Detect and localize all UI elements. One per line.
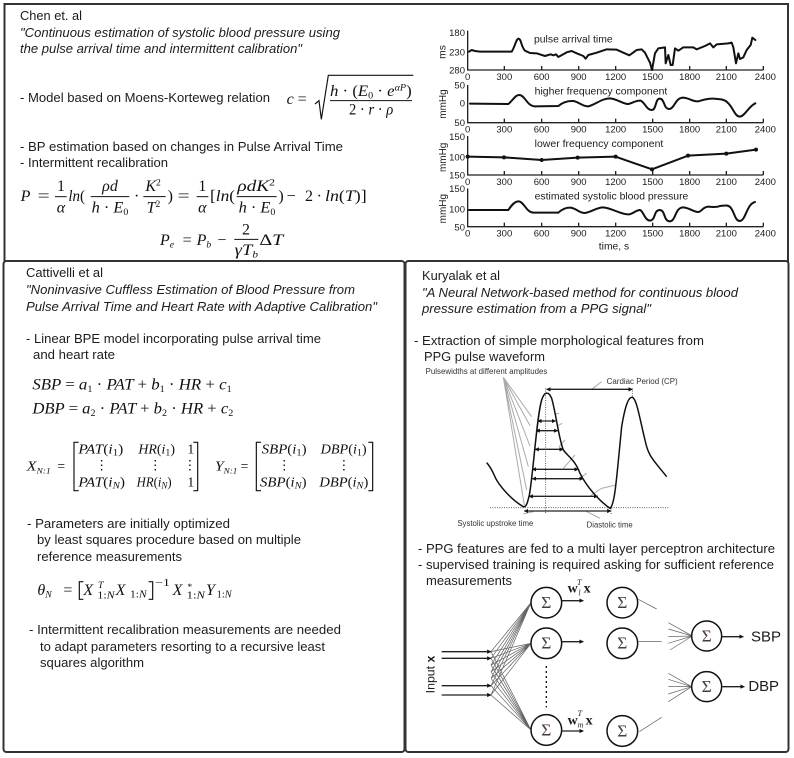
chart: lower frequency component: 150 bbox=[449, 132, 465, 143]
chart: lower frequency component: 1200 bbox=[605, 177, 626, 188]
text: parameter optimization bullet: reference measurements bbox=[37, 549, 182, 564]
chart: pulse arrival time: 600 bbox=[534, 72, 550, 83]
chart: estimated systolic blood pressure: time, s bbox=[599, 241, 629, 252]
author heading: Kuryalak: Kuryalak et al bbox=[422, 268, 500, 283]
paper title: Cattivelli: "Noninvasive Cuffless Estimation of Blood Pressure from bbox=[26, 282, 355, 297]
paper title: Kuryalak: "A Neural Network-based method for continuous blood bbox=[422, 285, 739, 300]
equation: pressure from PAT: α bbox=[198, 199, 207, 216]
chart: lower frequency component: 300 bbox=[496, 177, 512, 188]
chart: lower frequency component: 1800 bbox=[679, 177, 700, 188]
matrix: X: ⋮ bbox=[95, 457, 108, 472]
chart: estimated systolic blood pressure: 2400 bbox=[755, 229, 776, 240]
equation: pressure from PAT: [ln( bbox=[210, 188, 235, 205]
equations: SBP and DBP bbox=[31, 376, 234, 419]
chart: estimated systolic blood pressure: 1200 bbox=[605, 229, 626, 240]
text: parameter optimization bullet: - Parameters are initially optimized bbox=[27, 516, 230, 531]
text: parameter optimization bullet bbox=[27, 516, 301, 564]
output nodes bbox=[692, 621, 722, 702]
chart: lower frequency component: 150 bbox=[449, 171, 465, 182]
input label: Input x bbox=[423, 655, 437, 693]
equation: wave velocity: · bbox=[373, 83, 387, 100]
chart: estimated systolic blood pressure: mmHg bbox=[438, 194, 449, 223]
second layer nodes: Σ bbox=[617, 634, 627, 653]
equation: pressure from PAT: ln(T)] bbox=[325, 188, 367, 205]
equation: wave velocity: αP bbox=[395, 83, 406, 94]
chart: higher frequency component: 50 bbox=[454, 81, 465, 92]
chart: pulse arrival time: 2100 bbox=[716, 72, 737, 83]
equation: pressure from PAT: ) bbox=[278, 188, 284, 205]
chart: higher frequency component bbox=[438, 81, 776, 136]
equation: estimated pressure: 2 bbox=[242, 221, 250, 238]
chart: estimated systolic blood pressure: 600 bbox=[534, 229, 550, 240]
equation: estimated pressure: γT bbox=[235, 242, 250, 259]
input arrows bbox=[442, 652, 491, 695]
equation: pressure from PAT: = bbox=[38, 188, 50, 205]
chart: higher frequency component: 2400 bbox=[755, 125, 776, 136]
weight label: w l: w bbox=[568, 582, 579, 597]
equation: theta least squares: 1:N bbox=[187, 590, 206, 601]
second layer nodes bbox=[607, 587, 638, 746]
equation: pressure from PAT: h · E bbox=[239, 199, 270, 216]
equation: pressure from PAT: 2 bbox=[305, 188, 313, 205]
equation: pressure from PAT: ) bbox=[168, 188, 173, 205]
text: MLP bullets: - supervised training is required asking for sufficient reference bbox=[418, 557, 774, 572]
equation: estimated pressure: b bbox=[252, 250, 258, 261]
chart: pulse arrival time: 180 bbox=[449, 28, 465, 39]
matrix: Y: ) bbox=[362, 441, 367, 457]
matrix: X: ⋮ bbox=[149, 457, 162, 472]
equation: pressure from PAT: − bbox=[287, 188, 296, 205]
chart: estimated systolic blood pressure: estimated systolic blood pressure bbox=[535, 191, 689, 202]
weight label: w l: T bbox=[577, 578, 582, 587]
matrix: X: X bbox=[27, 459, 35, 474]
paper title: Cattivelli bbox=[26, 282, 378, 314]
chart: pulse arrival time: 1500 bbox=[642, 72, 663, 83]
text: BP estimation bullets: - Intermittent recalibration bbox=[20, 155, 168, 170]
matrix: X: N:1 bbox=[35, 466, 51, 475]
text: MLP bullets: - PPG features are fed to a multi layer perceptron architecture bbox=[418, 541, 775, 556]
matrix: X: = bbox=[57, 459, 65, 474]
hidden layer nodes: Σ bbox=[541, 720, 551, 739]
chart: higher frequency component: 0 bbox=[460, 99, 465, 110]
matrix: Y bbox=[215, 441, 373, 492]
text: linear BPE model bullet bbox=[26, 331, 321, 362]
matrix: X: HR(i bbox=[138, 441, 165, 456]
matrix: Y: N bbox=[294, 481, 302, 492]
chart: higher frequency component: 900 bbox=[571, 125, 587, 136]
matrix: X: PAT(i bbox=[78, 441, 112, 456]
equations: SBP and DBP: HR + c bbox=[181, 400, 228, 417]
matrix: X: 1 bbox=[187, 475, 194, 490]
matrix: Y: ) bbox=[302, 441, 307, 457]
second layer nodes: Σ bbox=[617, 593, 627, 612]
label: cardiac period: Cardiac Period (CP) bbox=[607, 377, 678, 386]
equation: pressure from PAT: · bbox=[134, 188, 139, 205]
matrix: X bbox=[25, 441, 198, 492]
weight label: w m: w bbox=[568, 713, 579, 728]
chart: lower frequency component: 900 bbox=[571, 177, 587, 188]
chart: higher frequency component: higher frequency component bbox=[535, 87, 667, 98]
equations: SBP and DBP: · bbox=[92, 376, 106, 393]
equation: estimated pressure: P bbox=[160, 232, 170, 249]
hidden layer dotted ellipsis bbox=[544, 666, 548, 707]
equation: pressure from PAT: 2 bbox=[269, 178, 275, 189]
matrix: Y: DBP(i bbox=[319, 475, 356, 490]
pulsewidth arrows bbox=[524, 389, 632, 511]
equation: theta least squares: X bbox=[172, 582, 184, 599]
equations: SBP and DBP: HR + c bbox=[179, 376, 226, 393]
chart: lower frequency component: 0 bbox=[465, 177, 470, 188]
input connections bbox=[491, 603, 531, 730]
equation: pressure from PAT bbox=[20, 178, 367, 218]
output arrows bbox=[722, 637, 744, 687]
chart: estimated systolic blood pressure: 1500 bbox=[642, 229, 663, 240]
matrix: Y: ) bbox=[363, 475, 368, 491]
chart: lower frequency component: mmHg bbox=[438, 143, 449, 172]
equation: theta least squares: T bbox=[98, 580, 104, 591]
equation: estimated pressure: − bbox=[217, 232, 226, 249]
equations: SBP and DBP: 1 bbox=[160, 384, 165, 395]
matrix: Y: SBP(i bbox=[262, 441, 296, 456]
text: parameter optimization bullet: by least squares procedure based on multiple bbox=[37, 532, 301, 547]
matrix: Y: = bbox=[241, 459, 249, 474]
text: recalibration bullet: squares algorithm bbox=[40, 655, 144, 670]
equation: theta least squares: 1:N bbox=[130, 590, 148, 601]
author heading: Cattivelli: Cattivelli et al bbox=[26, 265, 103, 280]
equation: pressure from PAT: 1 bbox=[57, 178, 65, 195]
matrix: X: N bbox=[160, 481, 168, 492]
hidden layer nodes bbox=[531, 587, 562, 745]
equations: SBP and DBP: 2 bbox=[162, 408, 167, 419]
chart: pulse arrival time: 280 bbox=[449, 65, 465, 76]
equation: pressure from PAT: P bbox=[20, 188, 31, 205]
equation: estimated pressure: = bbox=[183, 232, 192, 249]
text: linear BPE model bullet: - Linear BPE model incorporating pulse arrival time bbox=[26, 331, 321, 346]
text: recalibration bullet bbox=[29, 622, 341, 670]
matrix: X: ) bbox=[167, 475, 172, 491]
matrix: X: 1 bbox=[187, 441, 194, 456]
text: BP estimation bullets: - BP estimation based on changes in Pulse Arrival Time bbox=[20, 139, 343, 154]
diagram: PPG pulse waveform features bbox=[426, 367, 678, 529]
chart: lower frequency component: lower frequency component bbox=[535, 139, 663, 150]
chart: higher frequency component: 1800 bbox=[679, 125, 700, 136]
chart: estimated systolic blood pressure: 1800 bbox=[679, 229, 700, 240]
equation: pressure from PAT: 0 bbox=[270, 207, 276, 218]
equation: pressure from PAT: ln( bbox=[68, 188, 85, 205]
chart: lower frequency component: 2400 bbox=[755, 177, 776, 188]
chart: estimated systolic blood pressure: 0 bbox=[465, 229, 470, 240]
output nodes: Σ bbox=[702, 626, 712, 645]
equation: wave velocity: h · (E bbox=[330, 83, 368, 100]
panel: Kuryalak et al bbox=[406, 261, 788, 752]
matrix: X: ) bbox=[170, 441, 175, 457]
matrix: X: ) bbox=[118, 441, 123, 457]
chart: estimated systolic blood pressure: 50 bbox=[454, 223, 465, 234]
equation: wave velocity bbox=[287, 75, 413, 119]
equation: pressure from PAT: h · E bbox=[92, 199, 123, 216]
text: morphological features bullet bbox=[414, 333, 704, 364]
equation: pressure from PAT: 1 bbox=[198, 178, 206, 195]
text: morphological features bullet: PPG pulse waveform bbox=[424, 349, 545, 364]
chart: estimated systolic blood pressure: 150 bbox=[449, 184, 465, 195]
equation: wave velocity: 0 bbox=[368, 91, 373, 102]
diagram: multilayer perceptron bbox=[423, 578, 781, 746]
second layer nodes: Σ bbox=[617, 721, 627, 740]
equations: SBP and DBP: PAT + b bbox=[106, 376, 159, 393]
equations: SBP and DBP: 1 bbox=[87, 384, 93, 395]
chart: higher frequency component: 1500 bbox=[642, 125, 663, 136]
chart: estimated systolic blood pressure: 2100 bbox=[716, 229, 737, 240]
matrix: Y: 1 bbox=[296, 447, 302, 458]
chart: lower frequency component: 2100 bbox=[716, 177, 737, 188]
matrix: X: PAT(i bbox=[78, 475, 112, 490]
label: diastolic time: Diastolic time bbox=[587, 520, 633, 529]
equation: wave velocity: = bbox=[298, 91, 307, 108]
chart: estimated systolic blood pressure: 300 bbox=[496, 229, 512, 240]
equation: theta least squares: −1 bbox=[155, 578, 170, 589]
chart: pulse arrival time: 300 bbox=[496, 72, 512, 83]
text: recalibration bullet: to adapt parameters resorting to a recursive least bbox=[40, 639, 325, 654]
equation: wave velocity: c bbox=[287, 91, 294, 108]
text: recalibration bullet: - Intermittent recalibration measurements are needed bbox=[29, 622, 341, 637]
matrix: X: HR(i bbox=[137, 475, 162, 490]
equation: theta least squares: Y bbox=[206, 582, 217, 599]
chart: higher frequency component: 600 bbox=[534, 125, 550, 136]
equation: wave velocity: e bbox=[387, 83, 394, 100]
pulsewidth leader lines bbox=[503, 377, 616, 518]
equations: SBP and DBP: · bbox=[165, 376, 179, 393]
matrix: Y: N:1 bbox=[223, 466, 237, 475]
equation: estimated pressure bbox=[159, 221, 285, 261]
equation: pressure from PAT: = bbox=[178, 188, 190, 205]
chart: pulse arrival time: 0 bbox=[465, 72, 470, 83]
waveform curve bbox=[487, 393, 667, 508]
second layer outgoing lines bbox=[638, 599, 662, 732]
label: systolic upstroke time: Systolic upstroke time bbox=[457, 519, 534, 528]
equations: SBP and DBP: 2 bbox=[90, 408, 96, 419]
equation: pressure from PAT: ρd bbox=[101, 178, 119, 195]
dotted reference lines bbox=[490, 388, 668, 515]
text: BP estimation bullets bbox=[20, 139, 343, 170]
text: morphological features bullet: - Extraction of simple morphological features from bbox=[414, 333, 704, 348]
equation: pressure from PAT: ρdK bbox=[237, 178, 264, 195]
equations: SBP and DBP: 2 bbox=[228, 408, 234, 419]
equation: theta least squares: X bbox=[115, 582, 127, 599]
matrix: Y: ⋮ bbox=[337, 457, 351, 472]
chart: pulse arrival time: 2400 bbox=[755, 72, 776, 83]
weight label: w m: m bbox=[578, 720, 584, 729]
weight label: w m: T bbox=[578, 709, 583, 718]
equation: estimated pressure: b bbox=[206, 240, 211, 251]
weight label: w l: l bbox=[578, 588, 581, 597]
chart: higher frequency component: 0 bbox=[465, 125, 470, 136]
equation: estimated pressure: P bbox=[197, 232, 206, 249]
equation: estimated pressure: e bbox=[170, 240, 175, 251]
matrix: X: N bbox=[111, 481, 120, 492]
chart: estimated systolic blood pressure: 100 bbox=[449, 205, 465, 216]
equation: pressure from PAT: T bbox=[147, 199, 156, 216]
matrix: X: ⋮ bbox=[183, 457, 197, 472]
equations: SBP and DBP: PAT + b bbox=[109, 400, 162, 417]
chart: higher frequency component: 2100 bbox=[716, 125, 737, 136]
matrix: Y: ) bbox=[302, 475, 307, 491]
chart: lower frequency component: 1500 bbox=[642, 177, 663, 188]
chart: higher frequency component: mmHg bbox=[438, 89, 449, 119]
chart: pulse arrival time: pulse arrival time bbox=[534, 35, 613, 46]
chart: lower frequency component bbox=[438, 132, 776, 188]
paper title: Kuryalak: pressure estimation from a PPG signal" bbox=[421, 301, 652, 316]
chart: higher frequency component: 1200 bbox=[605, 125, 626, 136]
equation: theta least squares: θ bbox=[37, 582, 45, 599]
paper title: Chen: "Continuous estimation of systolic blood pressure using bbox=[20, 25, 341, 40]
equations: SBP and DBP: SBP = a bbox=[32, 376, 87, 393]
output fans bbox=[668, 623, 692, 702]
matrix: X: 1 bbox=[113, 447, 118, 458]
equation: wave velocity: 2 · r · ρ bbox=[349, 102, 394, 119]
chart: pulse arrival time: ms bbox=[437, 45, 448, 59]
weight label: w m: x bbox=[586, 713, 593, 728]
equations: SBP and DBP: DBP = a bbox=[32, 400, 90, 417]
matrix: Y: SBP(i bbox=[260, 475, 294, 490]
matrix: X: ) bbox=[120, 475, 125, 491]
output label: DBP: DBP bbox=[748, 679, 779, 695]
chart: pulse arrival time: 230 bbox=[449, 47, 465, 58]
equation: pressure from PAT: 2 bbox=[156, 178, 161, 189]
equations: SBP and DBP: · bbox=[167, 400, 181, 417]
matrix: Y: ⋮ bbox=[278, 457, 291, 472]
equation: estimated pressure: ΔT bbox=[259, 232, 285, 249]
hidden layer output arrows bbox=[562, 601, 583, 731]
matrix: X: 1 bbox=[165, 447, 171, 458]
paper title: Kuryalak bbox=[421, 285, 739, 316]
author heading: Chen: Chen et. al bbox=[20, 8, 82, 23]
weight label: w l bbox=[568, 578, 591, 597]
chart: pulse arrival time: 1800 bbox=[679, 72, 700, 83]
chart: higher frequency component: 50 bbox=[454, 118, 465, 129]
equation: pressure from PAT: α bbox=[57, 199, 66, 216]
equation: theta least squares: 1:N bbox=[217, 590, 233, 601]
chart: lower frequency component: 600 bbox=[534, 177, 550, 188]
equation: theta least squares: N bbox=[44, 590, 52, 601]
paper title: Chen: the pulse arrival time and intermittent calibration" bbox=[20, 41, 303, 56]
equation: wave velocity: ) bbox=[406, 83, 412, 100]
text: MLP bullets: measurements bbox=[426, 573, 512, 588]
panel: Cattivelli et al bbox=[4, 261, 404, 752]
equation: theta least squares bbox=[37, 578, 233, 601]
label: pulsewidths: Pulsewidths at different amplitudes bbox=[426, 367, 547, 376]
chart: pulse arrival time bbox=[437, 28, 776, 83]
matrix: Y: N bbox=[356, 481, 364, 492]
hidden layer nodes: Σ bbox=[541, 634, 551, 653]
equation: pressure from PAT: K bbox=[145, 178, 156, 195]
output label: SBP: SBP bbox=[751, 630, 781, 646]
matrix: Y: 1 bbox=[357, 447, 362, 458]
chart: estimated systolic blood pressure: 900 bbox=[571, 229, 587, 240]
equation: pressure from PAT: · bbox=[317, 188, 322, 205]
text: Moens-Korteweg bullet: - Model based on Moens-Korteweg relation bbox=[20, 90, 270, 105]
equations: SBP and DBP: 1 bbox=[227, 384, 232, 395]
panel: Chen et al bbox=[4, 4, 788, 262]
equation: theta least squares: = bbox=[63, 582, 72, 599]
chart: estimated systolic blood pressure bbox=[438, 184, 776, 252]
weight label: w m bbox=[568, 709, 593, 729]
chart: pulse arrival time: 900 bbox=[571, 72, 587, 83]
equation: pressure from PAT: 2 bbox=[156, 199, 161, 210]
equation: theta least squares: 1:N bbox=[97, 590, 116, 601]
equation: theta least squares: X bbox=[82, 582, 94, 599]
paper title: Chen bbox=[20, 25, 341, 56]
chart: higher frequency component: 300 bbox=[496, 125, 512, 136]
matrix: Y: Y bbox=[215, 459, 223, 474]
output nodes: Σ bbox=[702, 677, 712, 696]
text: MLP bullets bbox=[418, 541, 775, 588]
equation: theta least squares: * bbox=[187, 582, 192, 593]
weight label: w l: x bbox=[584, 582, 591, 597]
chart: lower frequency component: 100 bbox=[449, 152, 465, 163]
equation: pressure from PAT: 0 bbox=[123, 207, 129, 218]
equations: SBP and DBP: · bbox=[96, 400, 109, 417]
chart: pulse arrival time: 1200 bbox=[605, 72, 626, 83]
paper title: Cattivelli: Pulse Arrival Time and Heart Rate with Adaptive Calibration" bbox=[26, 299, 378, 314]
text: linear BPE model bullet: and heart rate bbox=[33, 347, 115, 362]
hidden layer nodes: Σ bbox=[541, 593, 551, 612]
matrix: Y: DBP(i bbox=[321, 441, 357, 456]
